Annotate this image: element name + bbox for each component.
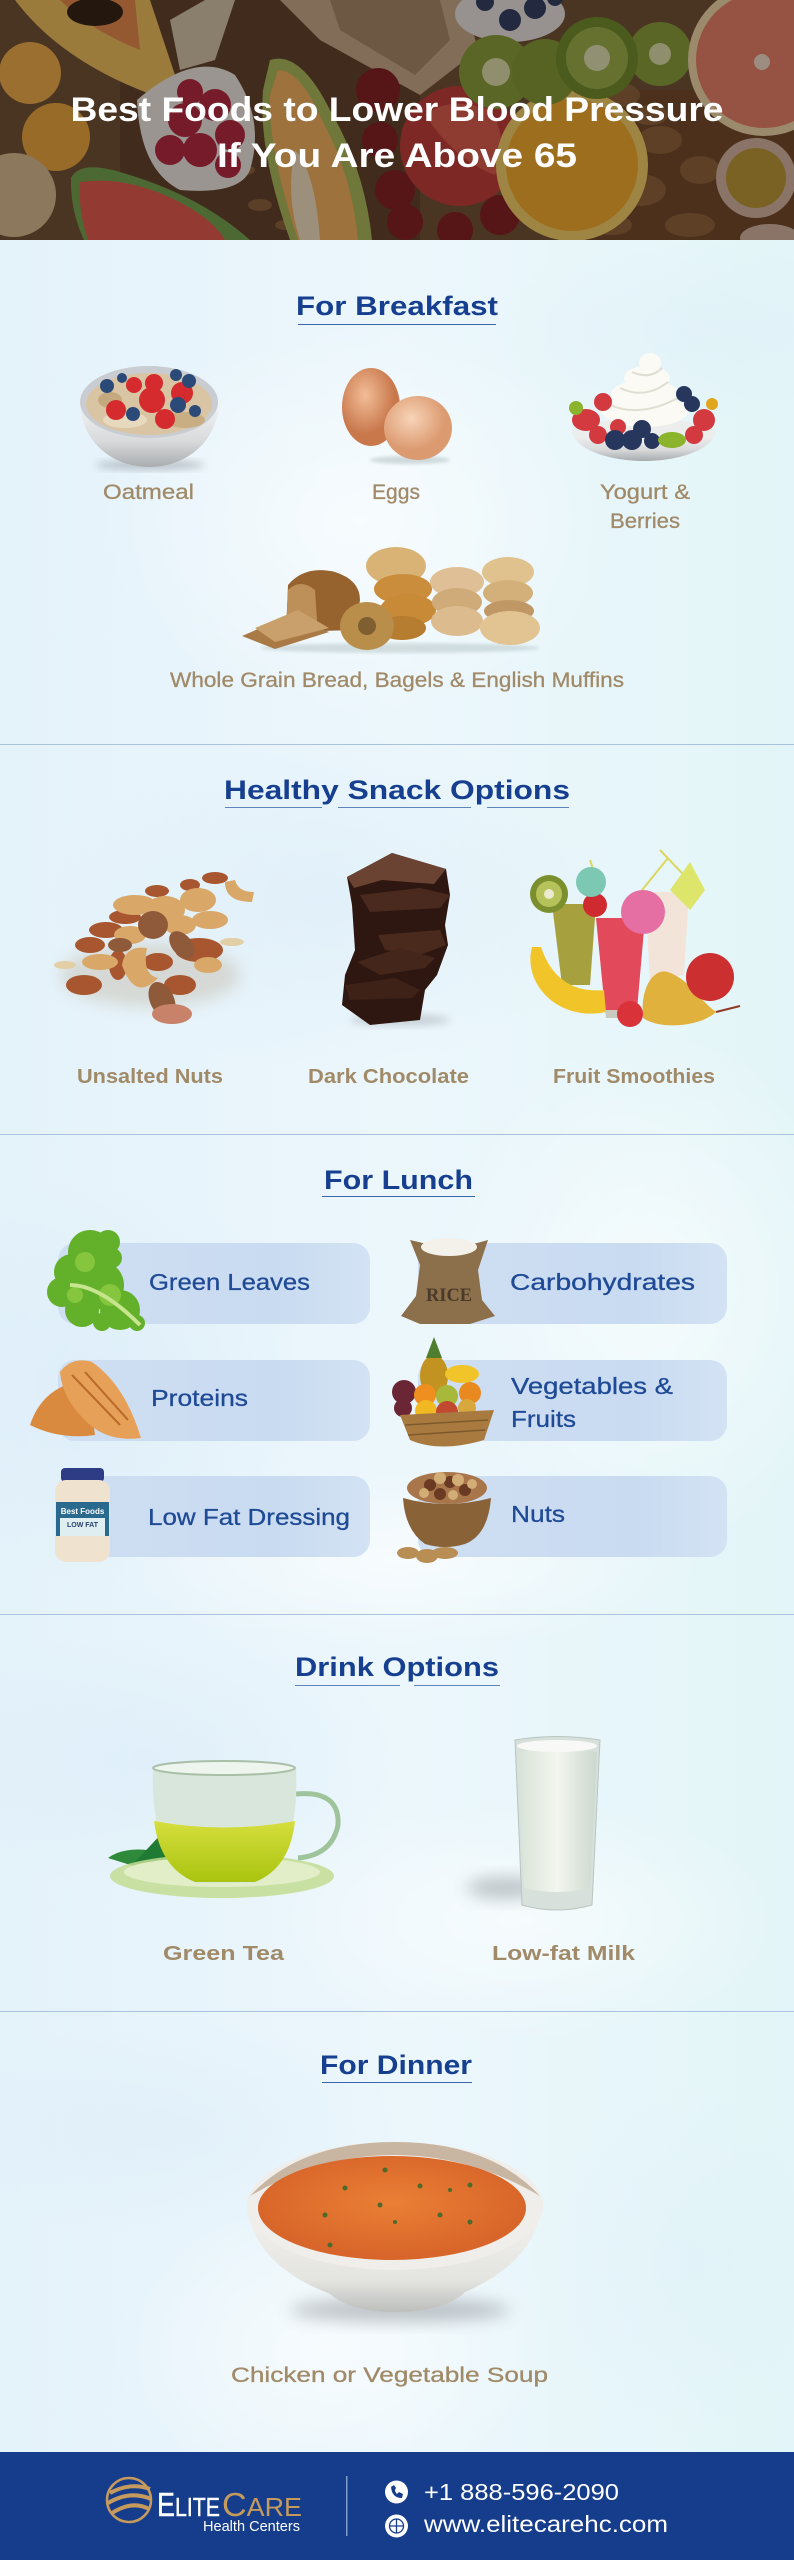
panel: drink options [0,1615,794,2011]
icon: fruit smoothies [530,850,740,1027]
title: If You Are Above 65 [217,137,577,175]
label: green tea: Green Tea [163,1943,285,1965]
label: vegetables and fruits: Vegetables & [511,1373,673,1399]
label: eggs: Eggs [372,481,420,504]
icon: whole grain bread, bagels and muffins [242,547,540,653]
section divider [0,2011,794,2012]
label: vegetables and fruits [511,1373,673,1432]
label: green leaves: Green Leaves [149,1269,310,1295]
icon: nuts bowl [397,1472,491,1563]
label: low fat dressing: Low Fat Dressing [148,1504,350,1530]
icon: rice sack: RICE [426,1285,472,1306]
icon: glass of milk [467,1736,600,1910]
icon: dressing jar [55,1468,110,1562]
icon: yogurt and berries [569,353,718,461]
section divider [0,744,794,745]
label: dark chocolate: Dark Chocolate [308,1066,469,1088]
label: yogurt and berries [600,481,690,533]
section divider [0,1614,794,1615]
icon: green tea cup [108,1761,338,1898]
label: nuts: Nuts [511,1501,565,1527]
label: oatmeal: Oatmeal [103,481,194,504]
logo: elite care health centers: ELITE [157,2486,220,2523]
title [70,91,724,175]
contact: phone number: +1 888-596-2090 [424,2479,619,2505]
panel: healthy snack options [0,745,794,1134]
label: yogurt and berries: Yogurt & [600,481,690,504]
icon: dark chocolate stack [342,853,450,1026]
label: carbohydrates: Carbohydrates [510,1269,695,1295]
panel: for dinner [0,2012,794,2452]
contact: website: www.elitecarehc.com [423,2511,668,2537]
heading: drink options: Drink Options [295,1652,499,1682]
item: green leaves [47,1230,370,1331]
label: fruit smoothies: Fruit Smoothies [553,1066,715,1088]
logo: elite care health centers: CARE [222,2486,302,2523]
header banner with food photo [0,0,794,252]
label: proteins: Proteins [151,1385,248,1411]
label: low-fat milk: Low-fat Milk [492,1943,636,1965]
icon: lettuce [47,1230,145,1331]
label: yogurt and berries: Berries [610,510,680,533]
label: unsalted nuts: Unsalted Nuts [77,1066,223,1088]
icon: chicken breasts [30,1360,141,1439]
heading: healthy snack options: Healthy Snack Options [224,775,570,805]
footer [0,2452,794,2560]
section divider [0,1134,794,1135]
heading: for dinner: For Dinner [320,2050,473,2080]
item: low fat dressing [55,1468,370,1562]
icon: rice sack [401,1238,495,1324]
item: nuts [397,1472,727,1563]
icon: globe [385,2514,408,2538]
panel: for breakfast [0,241,794,744]
logo: elite care health centers: Health Centers [203,2518,300,2535]
icon: unsalted nuts [54,872,254,1024]
icon: phone [385,2480,408,2504]
heading: for breakfast: For Breakfast [296,291,498,321]
item: vegetables and fruits [392,1337,727,1446]
label: vegetables and fruits: Fruits [511,1406,576,1432]
item: carbohydrates [401,1238,727,1324]
icon: dressing jar: LOW FAT [67,1522,99,1529]
icon: fruit basket [392,1337,494,1446]
icon: soup bowl [247,2142,543,2322]
panel: for lunch [0,1135,794,1614]
logo: elite care health centers [107,2478,302,2535]
title: Best Foods to Lower Blood Pressure [70,91,724,129]
label: whole grain bread, bagels and english muffins: Whole Grain Bread, Bagels & English Muffins [170,669,624,692]
heading: for lunch: For Lunch [324,1165,473,1195]
item: proteins [30,1360,370,1441]
icon: eggs [342,368,452,464]
icon: oatmeal bowl [80,366,219,470]
label: chicken or vegetable soup: Chicken or Vegetable Soup [231,2364,548,2387]
icon: dressing jar: Best Foods [61,1507,105,1516]
